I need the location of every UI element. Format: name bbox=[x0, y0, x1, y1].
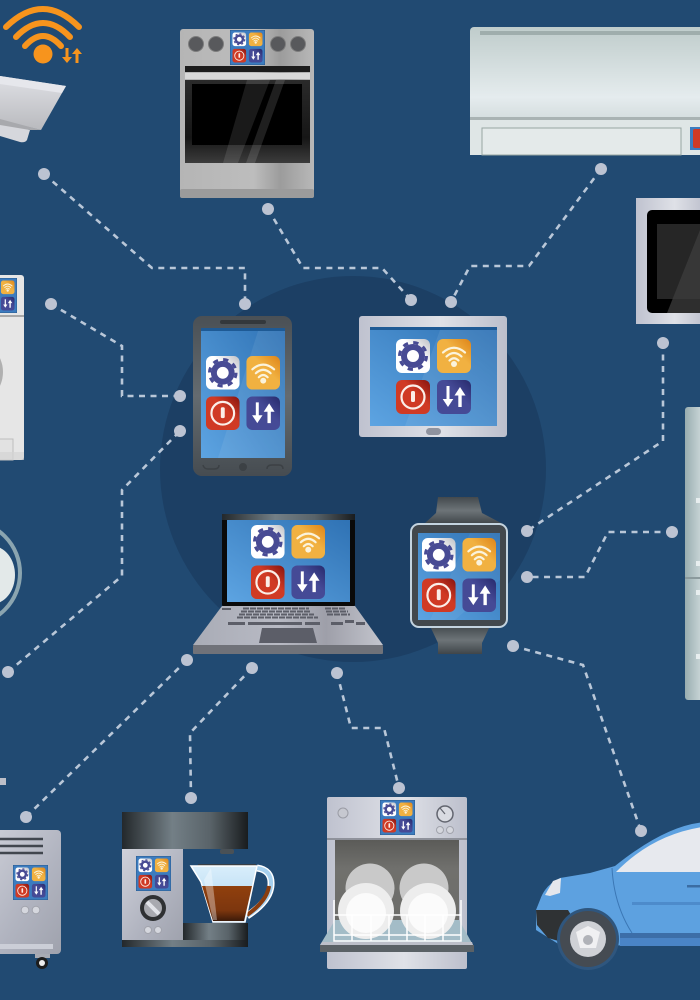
small appliance stub bbox=[0, 778, 6, 785]
round appliance bbox=[0, 521, 20, 625]
fridge bbox=[685, 407, 700, 700]
microwave bbox=[636, 198, 700, 324]
heater bbox=[0, 830, 61, 969]
central hub circle bbox=[160, 276, 546, 662]
car bbox=[536, 822, 700, 970]
device: smartwatch bbox=[411, 497, 507, 654]
air conditioner bbox=[470, 27, 700, 155]
device: laptop bbox=[193, 514, 383, 654]
coffee machine bbox=[122, 812, 271, 947]
washing machine bbox=[0, 275, 24, 460]
security camera bbox=[0, 76, 66, 142]
icon: wifi signal bbox=[6, 9, 82, 64]
carafe bbox=[191, 864, 271, 922]
dishwasher bbox=[320, 797, 474, 969]
device: smartphone bbox=[193, 316, 292, 476]
oven bbox=[180, 29, 314, 198]
device: tablet bbox=[359, 316, 507, 437]
connector lines bbox=[8, 169, 672, 831]
connector nodes bbox=[2, 163, 678, 837]
